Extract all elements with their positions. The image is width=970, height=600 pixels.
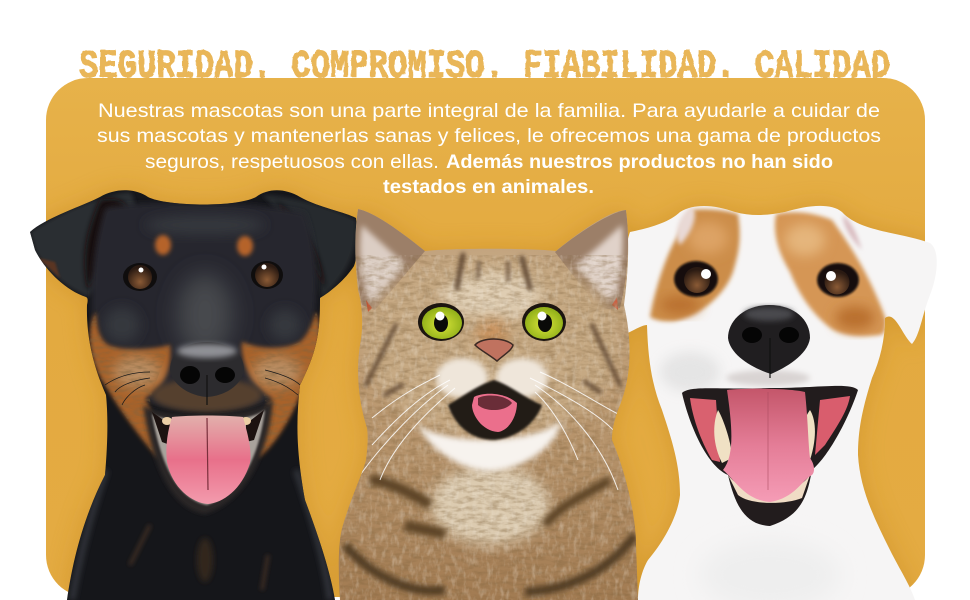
- dog ears: [30, 192, 356, 298]
- dog nose: [170, 342, 244, 405]
- cat body stripes: [345, 480, 635, 592]
- intro paragraph: Nuestras mascotas son una parte integral de la familia. Para ayudarle a cuidar de: [98, 100, 880, 122]
- dog tan cheeks: [90, 312, 320, 458]
- intro paragraph: [97, 100, 881, 198]
- cat chest light: [430, 465, 550, 545]
- intro paragraph: seguros, respetuosos con ellas.: [145, 151, 439, 173]
- dog open mouth: [682, 386, 858, 526]
- cat white chin: [418, 420, 562, 471]
- cat head fur: [364, 253, 620, 437]
- cat whiskers: [358, 372, 620, 490]
- animal shadows on the panel: [30, 190, 937, 600]
- dog eyes: [674, 261, 859, 297]
- cat eyes: [418, 303, 566, 341]
- dog eyes: [123, 261, 283, 291]
- illustration: black and tan dog: [20, 180, 370, 600]
- illustration: tabby cat: [330, 200, 650, 600]
- dog head: [92, 203, 316, 410]
- dog mouth and tongue: [143, 400, 273, 514]
- dog whiskers: [105, 370, 300, 405]
- panel: mustard background: [46, 78, 925, 597]
- cat mouth: [448, 380, 542, 440]
- cat nose: [475, 339, 513, 361]
- dog orange patches: [650, 209, 886, 336]
- dog nose: [728, 305, 810, 378]
- intro paragraph: testados en animales.: [383, 176, 594, 198]
- cat muzzle: [436, 358, 548, 398]
- cat forehead stripes: [366, 255, 620, 395]
- dog brow spots: [155, 235, 253, 256]
- illustration: white and orange dog: [624, 206, 936, 600]
- intro paragraph: sus mascotas y mantenerlas sanas y felices, le ofrecemos una gama de productos: [97, 125, 881, 147]
- cat ears: [356, 209, 628, 312]
- intro paragraph: Además nuestros productos no han sido: [446, 151, 833, 173]
